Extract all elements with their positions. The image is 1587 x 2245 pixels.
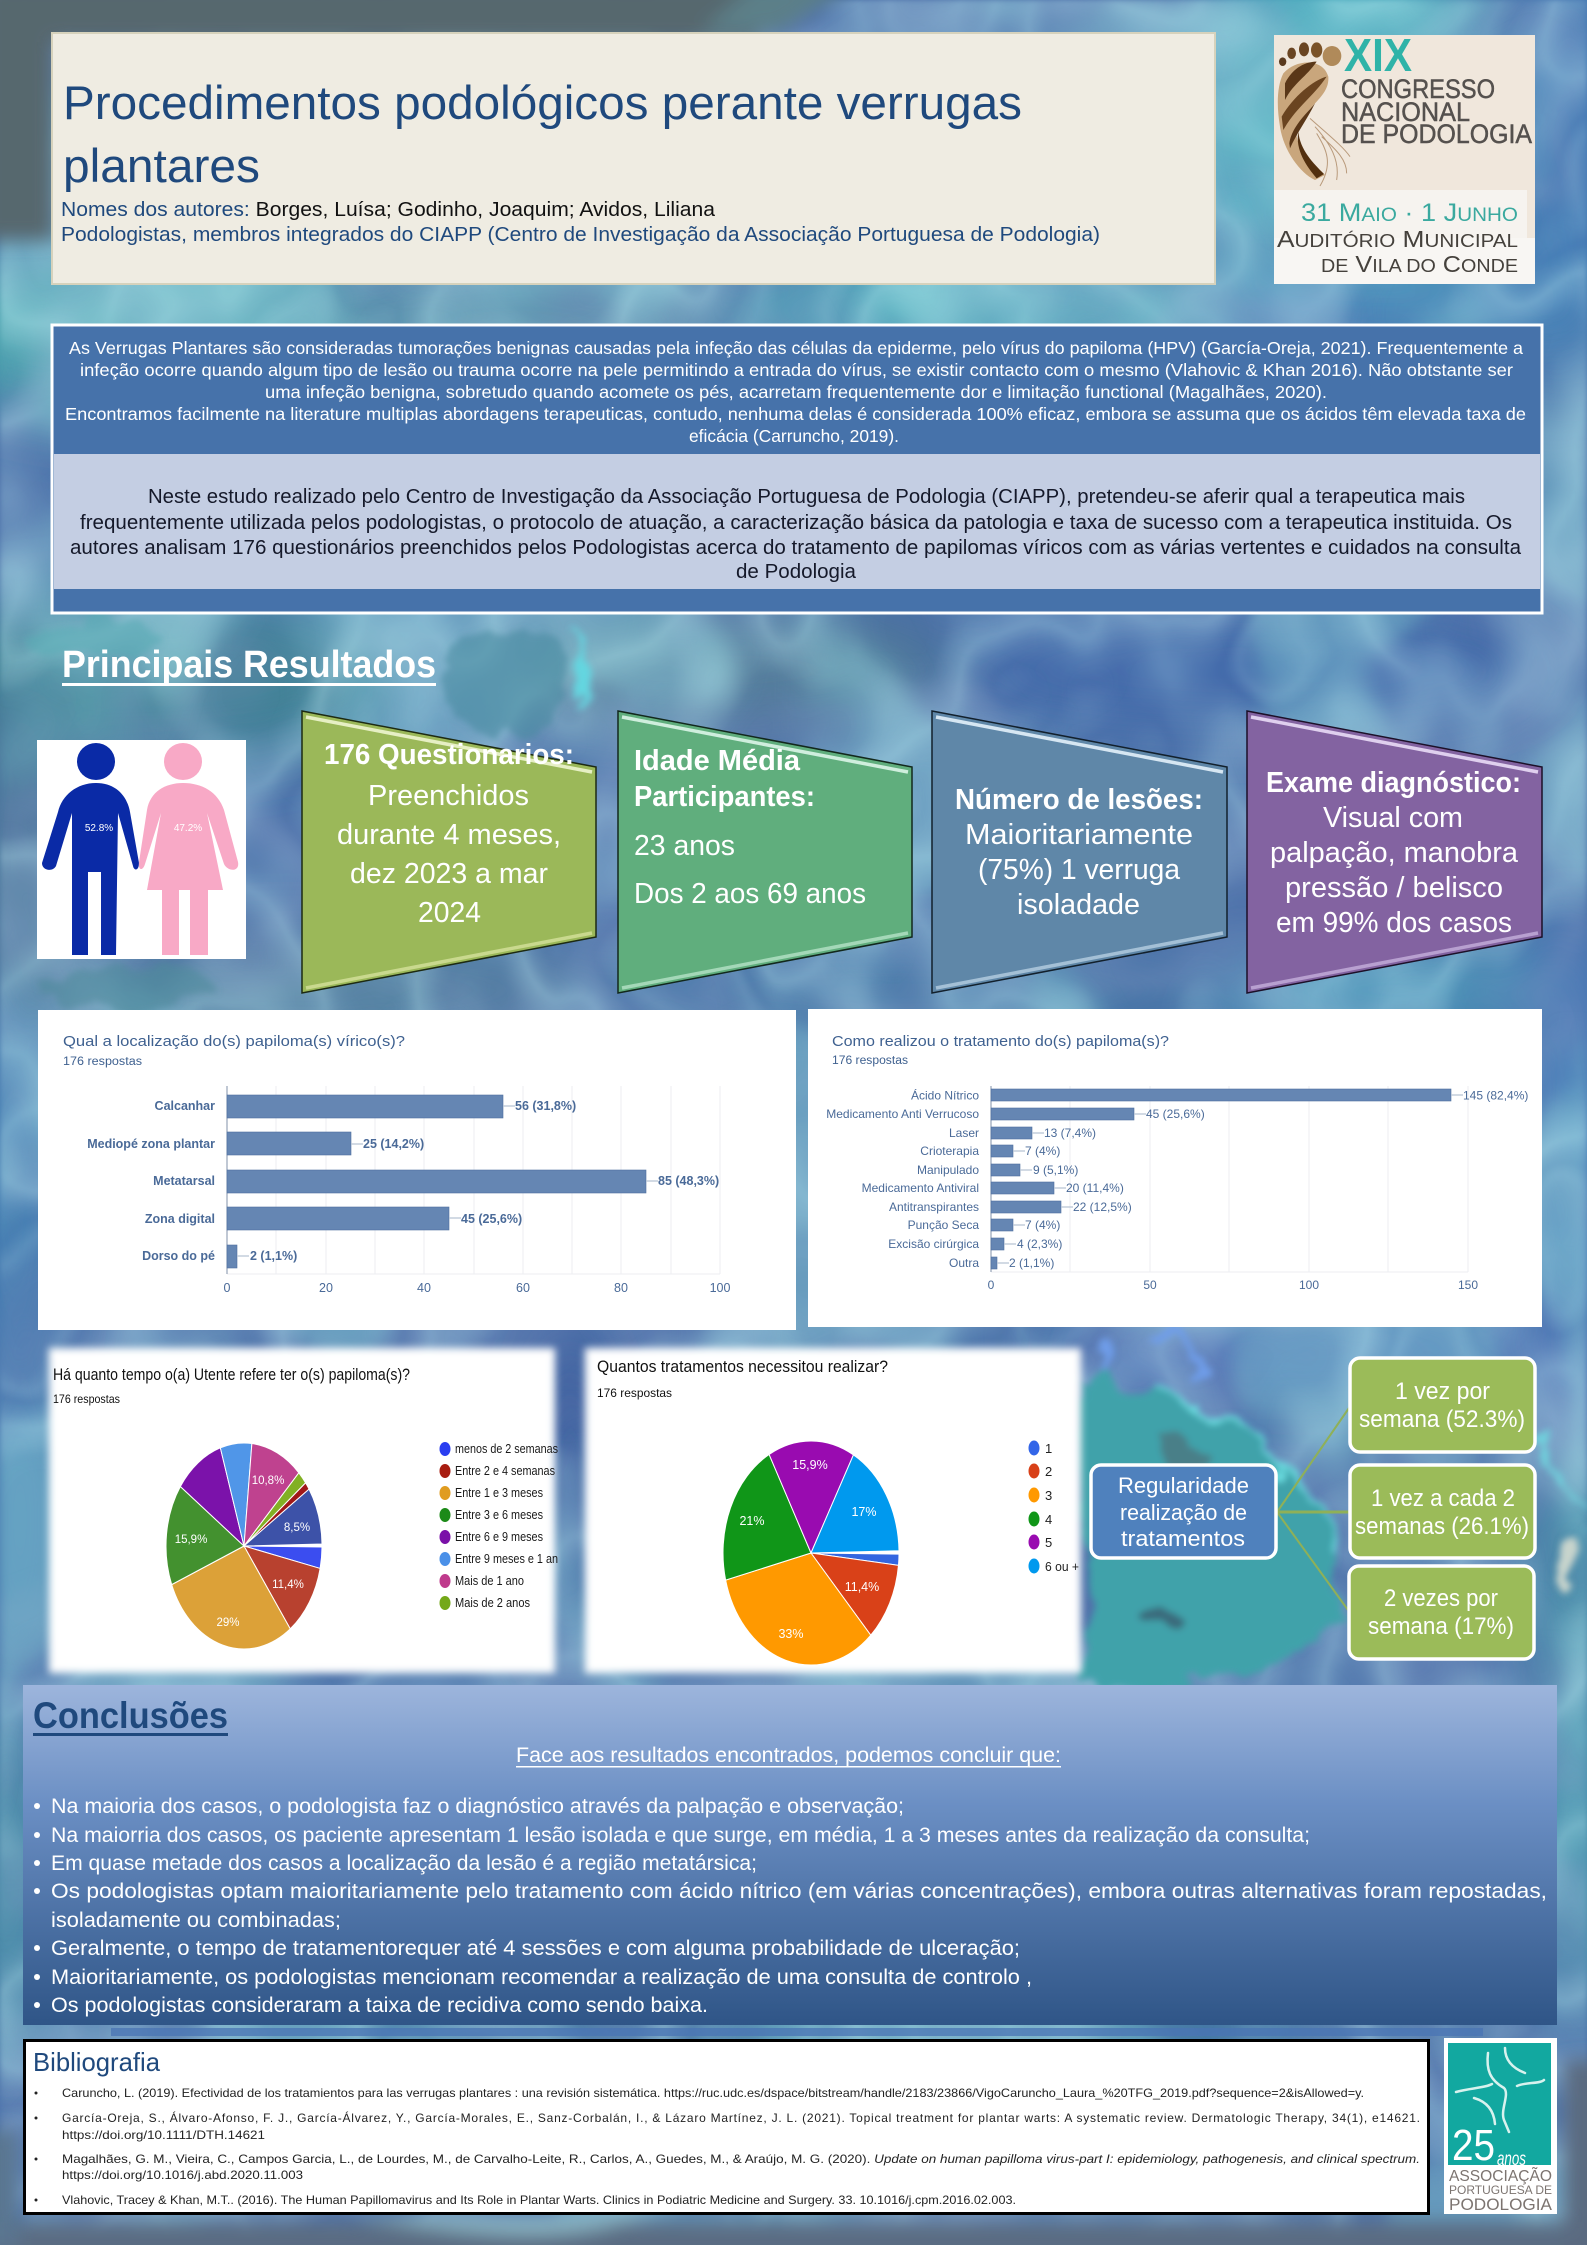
card: Exame diagnostico: Visual com [1323, 802, 1463, 834]
logo: XIX Congresso Nacional de Podologia: AUDITÓRIO MUNICIPAL [1277, 226, 1518, 252]
legend: Entre 6 e 9 meses [455, 1530, 543, 1544]
pie value labels: 11,4% [272, 1579, 304, 1591]
category labels: Crioterapia [920, 1144, 979, 1158]
value labels: 2 (1,1%) [250, 1249, 297, 1263]
legend: 5 [1045, 1535, 1052, 1550]
conclusions list [34, 1795, 1547, 2017]
introduction text: infeção ocorre quando algum tipo de lesão ou trauma ocorre na pele permitindo a entrada do vírus, se existir contacto com o mesmo (Vlahovic & Khan 2016). Não obtstante ser [80, 360, 1513, 380]
axis ticks [988, 1278, 1478, 1292]
value labels: 45 (25,6%) [1146, 1107, 1205, 1121]
icon: man and woman gender split [37, 740, 246, 959]
references: Caruncho, L. (2019). Efectividad de los tratamientos para las verrugas plantares : una revisión sistemática. https://ruc.udc.es/dspace/bitstream/handle/2183/23866/VigoCaruncho_Laura_%20TFG_2019.pdf?sequence=2&isAllowed=y. [62, 2086, 1364, 2100]
category labels: Manipulado [917, 1163, 979, 1177]
conclusions list: Geralmente, o tempo de tratamentorequer até 4 sessões e com alguma probabilidade de ulceração; [51, 1937, 1020, 1960]
value labels: 85 (48,3%) [658, 1174, 719, 1188]
introduction text: uma infeção benigna, sobretudo quando acomete os pés, acarretam frequentemente dor e limitação functional (Magalhães, 2020). [265, 382, 1327, 402]
response count: 176 respostas [63, 1056, 142, 1068]
logo: Associacao Portuguesa de Podologia 25 anos: 25 [1452, 2121, 1495, 2170]
study description text: de Podologia [736, 561, 857, 583]
value labels: 22 (12,5%) [1073, 1200, 1132, 1214]
card: Numero de lesoes: Número de lesões: [955, 784, 1203, 816]
pie value labels: 17% [851, 1505, 877, 1519]
value labels [1009, 1088, 1528, 1270]
category labels: Outra [949, 1256, 979, 1270]
logo: XIX Congresso Nacional de Podologia: XIX [1344, 29, 1412, 81]
pie value labels: 33% [778, 1627, 804, 1641]
references: Vlahovic, Tracey & Khan, M.T.. (2016). The Human Papillomavirus and Its Role in Plantar Warts. Clinics in Podiatric Medicine and Surgery. 33. 10.1016/j.cpm.2016.02.003. [62, 2193, 1016, 2207]
axis ticks: 100 [1299, 1278, 1319, 1292]
legend: Entre 1 e 3 meses [455, 1486, 543, 1500]
pie [723, 1441, 899, 1665]
category labels: Calcanhar [155, 1099, 215, 1113]
value labels: 25 (14,2%) [363, 1137, 424, 1151]
category labels [826, 1088, 979, 1270]
study description text: frequentemente utilizada pelos podologistas, o protocolo de atuação, a caracterização básica da patologia e taxa de sucesso com a terapeutica instituida. Os [80, 512, 1512, 534]
axis ticks: 80 [614, 1281, 628, 1295]
gridlines [991, 1086, 1468, 1272]
study description text: Neste estudo realizado pelo Centro de Investigação da Associação Portuguesa de Podologia (CIAPP), pretendeu-se aferir qual a terapeutica mais [148, 486, 1465, 508]
card: Exame diagnostico [1247, 711, 1542, 993]
title: plantares [63, 139, 260, 192]
value labels: 45 (25,6%) [461, 1212, 522, 1226]
panel: conclusions [23, 1685, 1557, 2025]
category labels: Laser [949, 1126, 979, 1140]
legend: 6 ou + [1045, 1559, 1079, 1574]
conclusions list: Na maiorria dos casos, os paciente apresentam 1 lesão isolada e que surge, em média, 1 a 3 meses antes da realização da consulta; [51, 1824, 1310, 1847]
pie [166, 1443, 322, 1649]
box: 1 vez por semana: semana (52.3%) [1359, 1406, 1525, 1433]
category labels: Medicamento Anti Verrucoso [826, 1107, 979, 1121]
logo: XIX Congresso Nacional de Podologia: DE PODOLOGIA [1341, 119, 1532, 149]
pie value labels: 11,4% [845, 1580, 879, 1594]
pie value labels: 10,8% [252, 1475, 284, 1487]
legend: 2 [1045, 1464, 1052, 1479]
axis ticks: 40 [417, 1281, 431, 1295]
box: 1 vez por semana: 1 vez por [1395, 1378, 1490, 1405]
axis ticks [224, 1281, 730, 1295]
card: Exame diagnostico: palpação, manobra [1270, 837, 1519, 869]
axis ticks: 20 [319, 1281, 333, 1295]
references: Magalhães, G. M., Vieira, C., Campos Garcia, L., de Lourdes, M., de Carvalho-Leite, R., Carlos, A., Guedes, M., & Araújo, M. G. (2020). Update on human papilloma virus-part I: epidemiology, pathogenesis, and clinical spectrum. [62, 2152, 1420, 2166]
conclusions list: Em quase metade dos casos a localização da lesão é a região metatársica; [51, 1852, 757, 1875]
conclusions list: Na maioria dos casos, o podologista faz o diagnóstico através da palpação e observação; [51, 1795, 904, 1818]
chart title: Quantos tratamentos necessitou realizar? [597, 1357, 888, 1376]
legend [440, 1442, 558, 1610]
card: Numero de lesoes [932, 711, 1227, 993]
value labels: 145 (82,4%) [1463, 1088, 1528, 1102]
title: Procedimentos podológicos perante verrugas [63, 76, 1022, 129]
pie value labels: 21% [739, 1514, 765, 1528]
legend: Mais de 1 ano [455, 1574, 524, 1588]
legend: Entre 9 meses e 1 an [455, 1552, 558, 1566]
axis ticks: 0 [988, 1278, 995, 1292]
bars [991, 1089, 1451, 1269]
introduction text: eficácia (Carruncho, 2019). [689, 426, 899, 446]
category labels: Antitranspirantes [889, 1200, 979, 1214]
pie value labels: 29% [216, 1617, 240, 1629]
card: 176 Questionarios: 2024 [418, 897, 481, 929]
category labels: Excisão cirúrgica [888, 1237, 979, 1251]
box: Regularidade realizacao de tratamentos [1091, 1465, 1276, 1558]
study description text: autores analisam 176 questionários preenchidos pelos Podologistas acerca do tratamento de papilomas víricos com as várias vertentes e cuidados na consulta [70, 537, 1522, 559]
legend [1028, 1440, 1079, 1574]
box: Regularidade realizacao de tratamentos: realização de [1120, 1500, 1247, 1525]
card: Numero de lesoes: (75%) 1 verruga [978, 854, 1181, 886]
pie value labels [175, 1475, 310, 1629]
panel: pie chart time with papilloma [49, 1348, 558, 1673]
response count: 176 respostas [597, 1386, 672, 1400]
card: 176 Questionarios: Preenchidos [368, 780, 529, 812]
pie value labels: 15,9% [175, 1534, 207, 1546]
box: 2 vezes por semana: semana (17%) [1368, 1613, 1514, 1640]
legend: menos de 2 semanas [455, 1442, 558, 1456]
category labels: Mediopé zona plantar [87, 1137, 215, 1151]
icon: man and woman gender split: 47.2% [174, 823, 202, 834]
value labels [250, 1099, 719, 1263]
bibliography heading: Bibliografia [33, 2047, 161, 2077]
category labels: Medicamento Antiviral [862, 1181, 979, 1195]
chart title: Qual a localização do(s) papiloma(s) vírico(s)? [63, 1033, 405, 1050]
value labels: 13 (7,4%) [1044, 1126, 1096, 1140]
box: 1 vez por semana [1350, 1358, 1535, 1452]
references [34, 2086, 1420, 2207]
connectors: regularity branches [1277, 1408, 1350, 1610]
value labels: 4 (2,3%) [1017, 1237, 1062, 1251]
value labels: 56 (31,8%) [515, 1099, 576, 1113]
logo: XIX Congresso Nacional de Podologia: 31 M AIO · 1 J UNHO [1301, 199, 1518, 227]
card: Idade Media Participantes: Participantes: [634, 781, 815, 813]
introduction text: Encontramos facilmente na literature multiplas abordagens terapeuticas, contudo, nenhuma delas é considerada 100% eficaz, embora se assuma que os ácidos têm elevada taxa de [65, 404, 1526, 424]
category labels: Dorso do pé [142, 1249, 215, 1263]
logo: XIX Congresso Nacional de Podologia [1274, 29, 1535, 284]
title panel [52, 33, 1215, 284]
references: https://doi.org/10.1016/j.abd.2020.11.003 [62, 2168, 303, 2182]
panel: bar chart treatment [808, 1009, 1542, 1327]
card: Idade Media Participantes: 23 anos [634, 830, 735, 862]
conclusions subtitle: Face aos resultados encontrados, podemos concluir que: [516, 1744, 1061, 1767]
card: Idade Media Participantes: Idade Média [634, 745, 801, 777]
panel: bar chart location [38, 1010, 796, 1330]
axis ticks: 50 [1143, 1278, 1157, 1292]
card: Exame diagnostico: pressão / belisco [1285, 872, 1503, 904]
axis ticks: 0 [224, 1281, 231, 1295]
response count: 176 respostas [832, 1055, 908, 1067]
legend: Entre 2 e 4 semanas [455, 1464, 555, 1478]
axis ticks: 150 [1458, 1278, 1478, 1292]
conclusions list: isoladamente ou combinadas; [51, 1909, 341, 1932]
logo: Associacao Portuguesa de Podologia 25 anos: PORTUGUESA DE [1449, 2185, 1552, 2197]
category labels: Punção Seca [908, 1218, 979, 1232]
axis ticks: 60 [516, 1281, 530, 1295]
box: 1 vez a cada 2 semanas: semanas (26.1%) [1355, 1513, 1529, 1540]
value labels: 7 (4%) [1025, 1144, 1060, 1158]
category labels: Zona digital [145, 1212, 215, 1226]
card: 176 Questionarios: 176 Questionarios: [324, 739, 574, 771]
legend: 3 [1045, 1488, 1052, 1503]
box: Regularidade realizacao de tratamentos: tratamentos [1121, 1526, 1245, 1551]
pie value labels: 8,5% [284, 1522, 310, 1534]
heading: Conclusoes: Conclusões [33, 1695, 228, 1736]
heading: Principais Resultados: Principais Resultados [62, 644, 436, 686]
affiliation: Podologistas, membros integrados do CIAPP (Centro de Investigação da Associação Portuguesa de Podologia) [61, 224, 1100, 246]
bars [227, 1095, 646, 1268]
chart title: Como realizou o tratamento do(s) papiloma(s)? [832, 1033, 1169, 1050]
logo: Associacao Portuguesa de Podologia 25 anos: anos [1497, 2149, 1526, 2170]
introduction panel [52, 325, 1542, 613]
logo: XIX Congresso Nacional de Podologia: NACIONAL [1341, 97, 1470, 127]
card: Idade Media Participantes: Dos 2 aos 69 anos [634, 878, 866, 910]
icon: man and woman gender split: 52.8% [85, 823, 113, 834]
conclusions list: Os podologistas consideraram a taixa de recidiva como sendo baixa. [51, 1994, 708, 2017]
category labels: Metatarsal [153, 1174, 215, 1188]
logo: Associacao Portuguesa de Podologia 25 anos: PODOLOGIA [1449, 2195, 1553, 2214]
gridlines [227, 1086, 720, 1274]
card: 176 Questionarios [302, 711, 596, 993]
logo: Associacao Portuguesa de Podologia 25 anos: ASSOCIAÇÃO [1449, 2165, 1552, 2185]
pie value labels [739, 1458, 879, 1641]
introduction text [65, 338, 1526, 446]
chart title: Há quanto tempo o(a) Utente refere ter o(s) papiloma(s)? [53, 1365, 410, 1384]
panel: bibliography [24, 2040, 1428, 2214]
value labels: 9 (5,1%) [1033, 1163, 1078, 1177]
category labels: Ácido Nítrico [911, 1088, 979, 1102]
axis ticks: 100 [710, 1281, 730, 1295]
authors: Nomes dos autores: Borges, Luísa; Godinho, Joaquim; Avidos, Liliana [61, 199, 716, 221]
conclusions list: Os podologistas optam maioritariamente pelo tratamento com ácido nítrico (em várias concentrações), embora outras alternativas foram repostadas, [51, 1880, 1547, 1903]
value labels: 7 (4%) [1025, 1218, 1060, 1232]
box: 1 vez a cada 2 semanas: 1 vez a cada 2 [1371, 1485, 1515, 1512]
conclusions list: Maioritariamente, os podologistas mencionam recomendar a realização de uma consulta de controlo , [51, 1966, 1032, 1989]
logo: Associacao Portuguesa de Podologia 25 anos [1444, 2038, 1557, 2214]
card: Exame diagnostico: Exame diagnóstico: [1266, 767, 1521, 799]
box: 2 vezes por semana: 2 vezes por [1384, 1585, 1498, 1612]
box: Regularidade realizacao de tratamentos: Regularidade [1118, 1473, 1249, 1498]
box: 1 vez a cada 2 semanas [1350, 1465, 1535, 1558]
value labels: 20 (11,4%) [1066, 1181, 1124, 1195]
legend: 4 [1045, 1512, 1052, 1527]
title [63, 76, 1022, 192]
panel: pie chart number of treatments [585, 1348, 1081, 1673]
introduction text: As Verrugas Plantares são consideradas tumorações benignas causadas pela infeção das células da epiderme, pelo vírus do papiloma (HPV) (García-Oreja, 2021). Frequentemente a [69, 338, 1523, 358]
card: Exame diagnostico: em 99% dos casos [1276, 907, 1512, 939]
card: 176 Questionarios: dez 2023 a mar [350, 858, 548, 890]
references: https://doi.org/10.1111/DTH.14621 [62, 2128, 265, 2142]
pie value labels: 15,9% [792, 1458, 828, 1472]
response count: 176 respostas [53, 1392, 120, 1406]
references: García-Oreja, S., Álvaro-Afonso, F. J., García-Álvarez, Y., García-Morales, E., Sanz-Corbalán, I., & Lázaro Martínez, J. L. (2021). Topical treatment for plantar warts: A systematic review. Dermatologic Therapy, 34(1), e14621. [62, 2110, 1420, 2125]
logo: XIX Congresso Nacional de Podologia: CONGRESSO [1341, 74, 1495, 104]
card: 176 Questionarios: durante 4 meses, [337, 819, 561, 851]
card: Idade Media Participantes [618, 711, 912, 993]
legend: Entre 3 e 6 meses [455, 1508, 543, 1522]
box: 2 vezes por semana [1349, 1566, 1534, 1659]
legend: Mais de 2 anos [455, 1596, 530, 1610]
card: Numero de lesoes: isoladade [1017, 889, 1140, 921]
logo: XIX Congresso Nacional de Podologia: DE VILA DO CONDE [1321, 251, 1518, 277]
category labels [87, 1099, 215, 1263]
value labels: 2 (1,1%) [1009, 1256, 1054, 1270]
card: Numero de lesoes: Maioritariamente [965, 819, 1193, 851]
legend: 1 [1045, 1441, 1052, 1456]
study description text [70, 486, 1522, 583]
